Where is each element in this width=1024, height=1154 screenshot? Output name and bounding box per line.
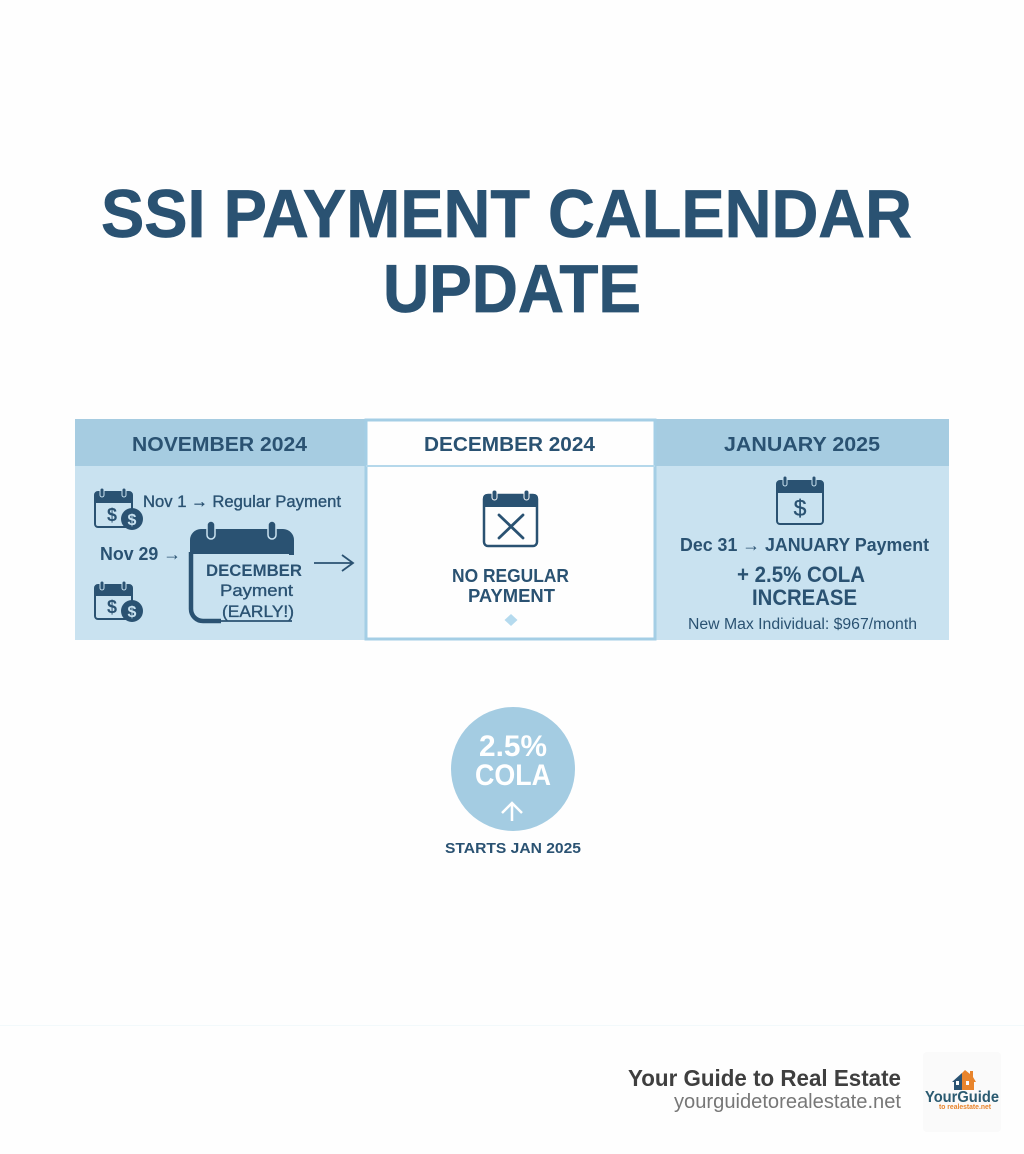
text: dec 31 january payment: Dec 31 → JANUARY Payment [680, 535, 929, 555]
panel: november 2024 [75, 419, 365, 640]
logo: to realestate.net [939, 1104, 992, 1111]
icon: calendar with x [483, 490, 538, 546]
heading: november 2024: NOVEMBER 2024 [132, 434, 308, 456]
panel: january 2025 [655, 419, 949, 640]
logo [923, 1052, 1001, 1132]
icon: calendar with dollar: $ [794, 495, 807, 521]
caption: starts jan 2025: STARTS JAN 2025 [445, 841, 581, 857]
text: no regular payment [452, 566, 569, 606]
title: UPDATE [383, 251, 641, 327]
text: no regular payment: NO REGULAR [452, 566, 569, 586]
icon: diamond [504, 614, 518, 626]
icon: calendar with dollar coin (bottom): $ [128, 604, 137, 621]
text: cola increase [737, 562, 865, 610]
icon: large december calendar: Payment [220, 581, 293, 600]
title [101, 176, 912, 327]
badge: 2.5% cola [451, 707, 575, 831]
text: cola increase: + 2.5% COLA [737, 562, 865, 587]
heading: december 2024: DECEMBER 2024 [424, 434, 596, 456]
heading: january 2025: JANUARY 2025 [724, 434, 880, 456]
icon: calendar with dollar coin (bottom): $ [107, 597, 117, 617]
footer: brand [0, 1026, 1024, 1132]
arrow: up [502, 803, 522, 821]
arrow: to december [314, 555, 353, 571]
icon: calendar with dollar coin (top): $ [128, 512, 137, 529]
icon: calendar with dollar [777, 476, 823, 524]
title: SSI PAYMENT CALENDAR [101, 176, 912, 252]
badge: 2.5% cola: 2.5% [479, 730, 547, 763]
icon: calendar with dollar coin (bottom) [95, 581, 143, 622]
text: nov 1 regular payment: Nov 1 → Regular Payment [143, 492, 341, 511]
icon: calendar with dollar coin (top): $ [107, 505, 117, 525]
footer url: yourguidetorealestate.net [674, 1091, 901, 1113]
logo: YourGuide [925, 1089, 999, 1106]
badge: 2.5% cola: COLA [475, 759, 551, 792]
text: cola increase: INCREASE [752, 585, 857, 610]
icon: calendar with dollar coin (top) [95, 488, 143, 530]
text: no regular payment: PAYMENT [468, 586, 555, 606]
icon: large december calendar [190, 521, 302, 621]
icon: large december calendar: (EARLY!) [222, 602, 294, 621]
footer brand name: Your Guide to Real Estate [628, 1065, 901, 1091]
panel: december 2024 [366, 420, 655, 639]
icon: large december calendar: DECEMBER [206, 561, 302, 580]
text: new max individual: New Max Individual: $967/month [688, 616, 917, 633]
text: nov 29: Nov 29 → [100, 544, 181, 564]
